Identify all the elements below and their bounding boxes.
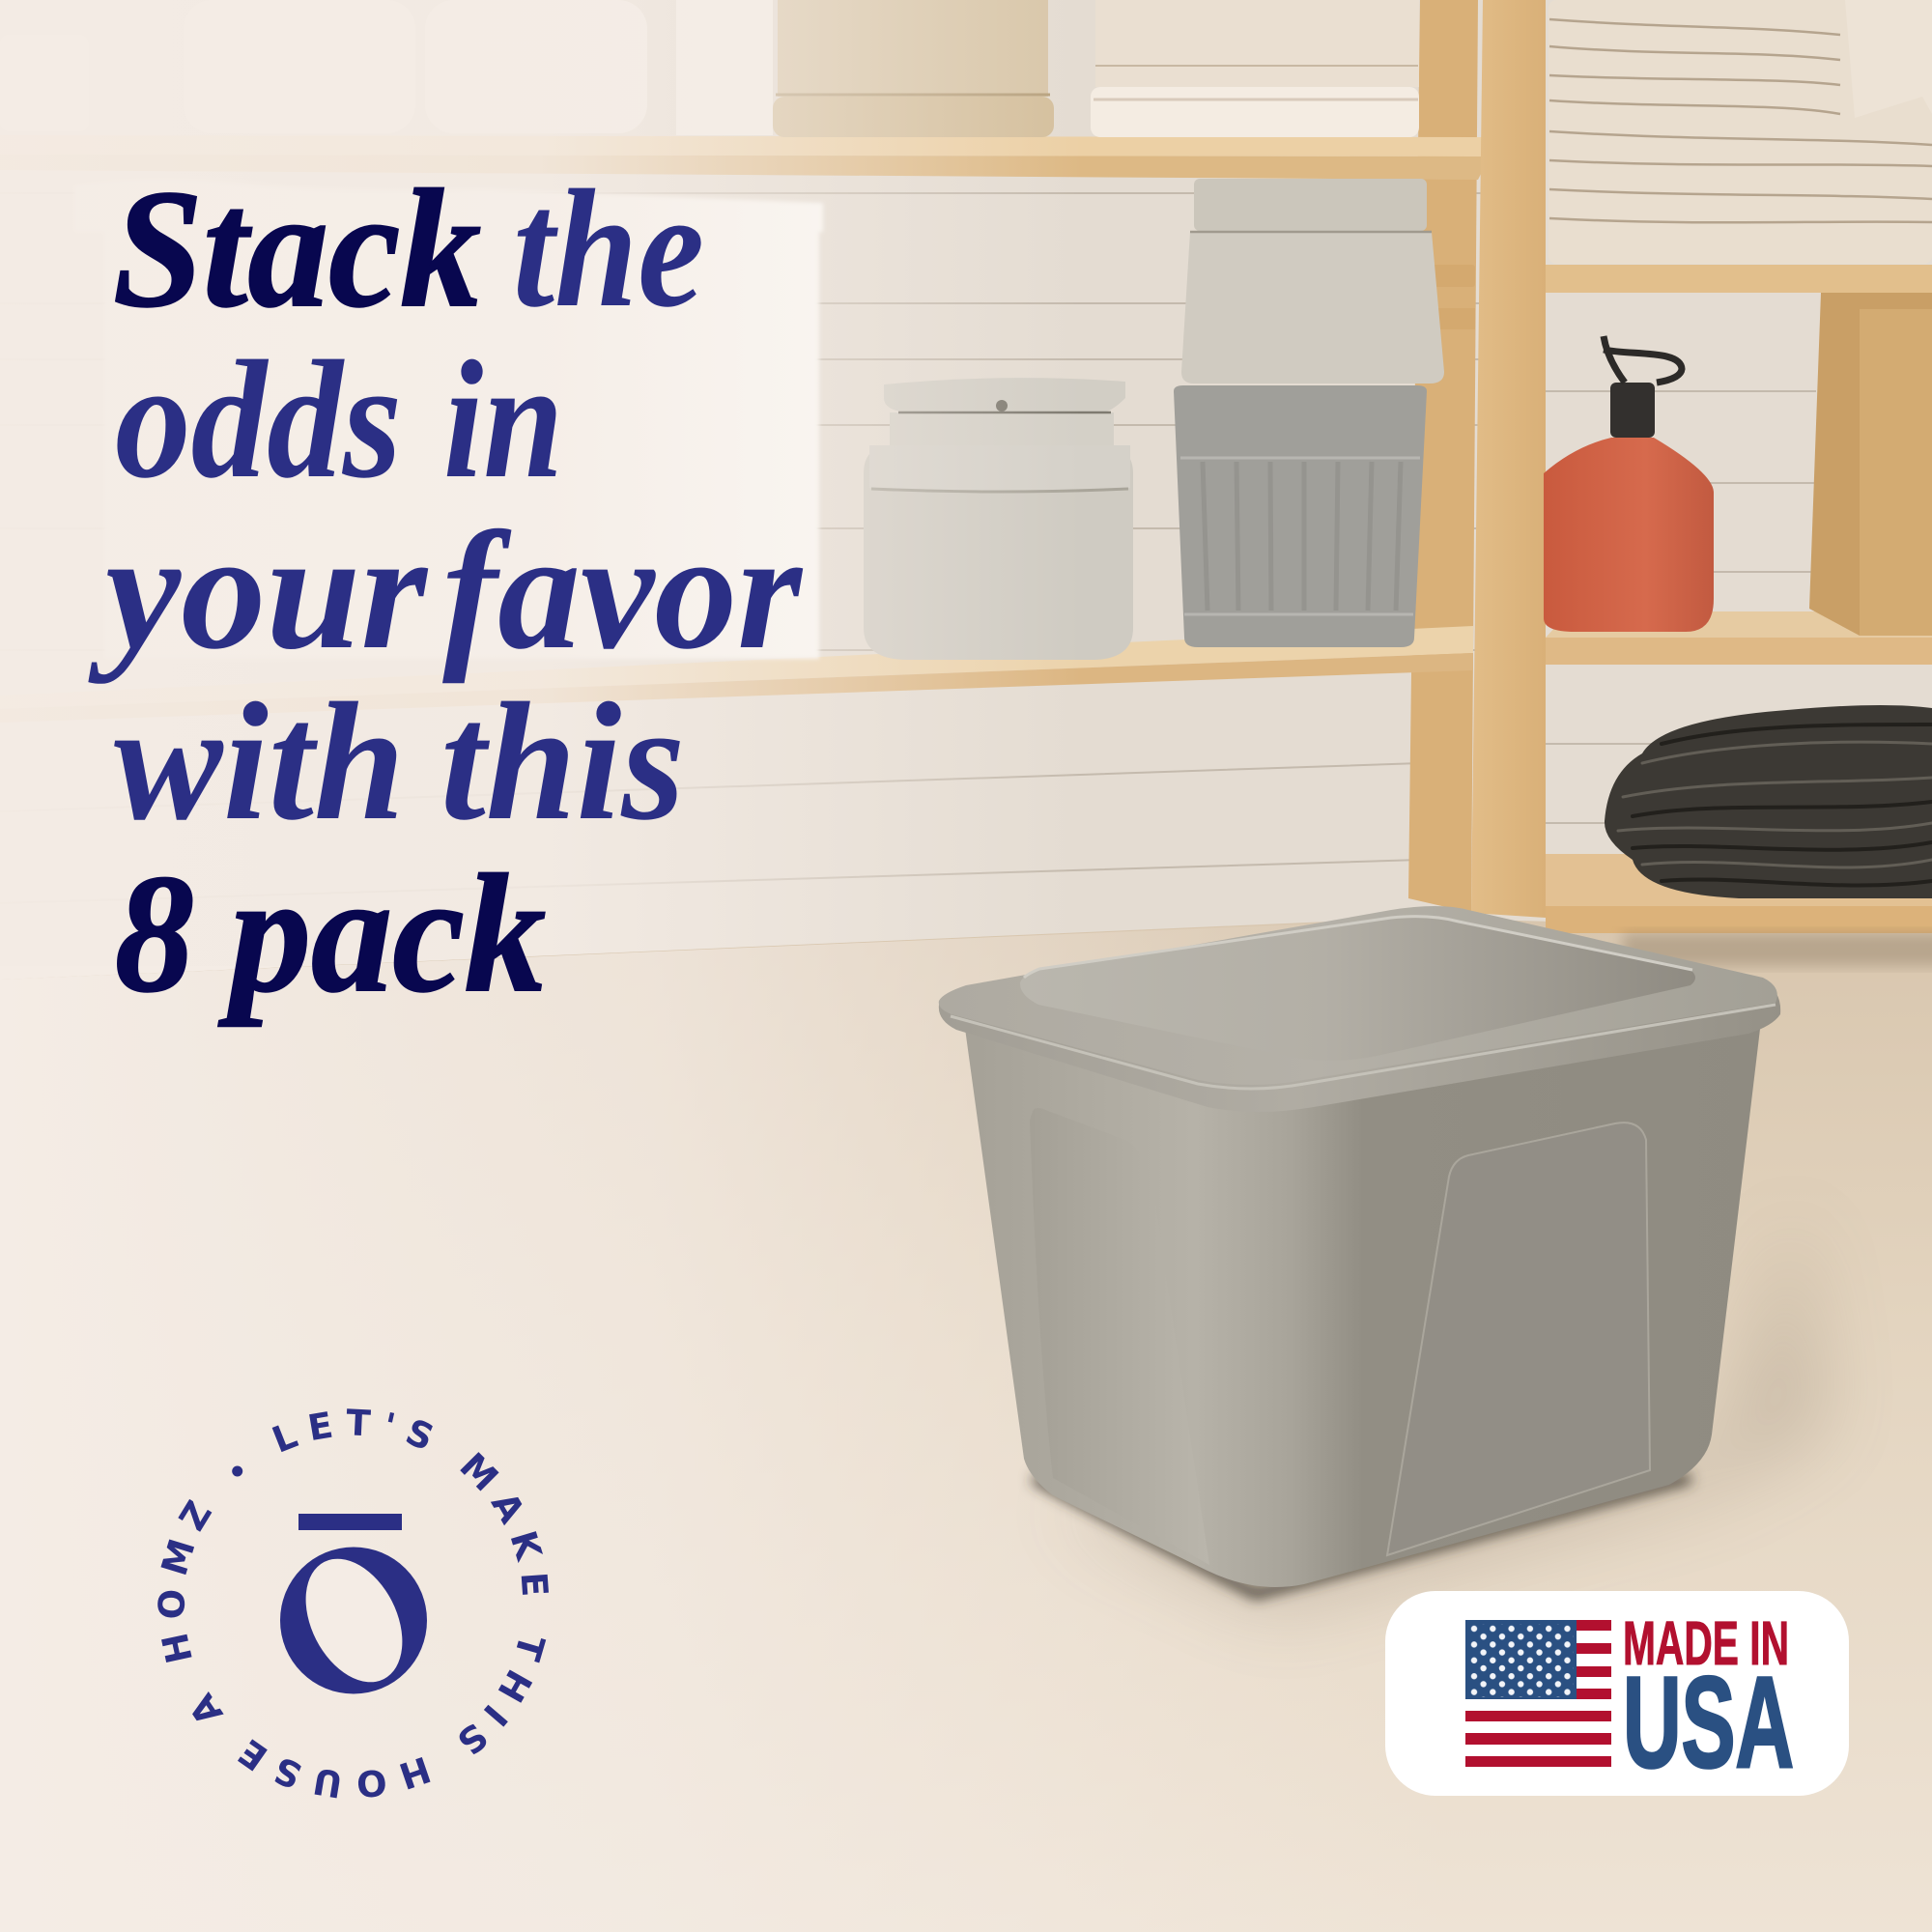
USA label: USA (1623, 1651, 1794, 1795)
headline line 1 (113, 155, 704, 342)
top shelf (0, 135, 1490, 180)
striped fabric bin (1548, 0, 1932, 264)
headline line 4: with (114, 668, 405, 855)
bin body (963, 1005, 1763, 1587)
bin opening (1020, 917, 1695, 1061)
headline line 1: the (513, 155, 704, 342)
main post (1471, 0, 1546, 918)
stacked round pot with lid (864, 378, 1133, 660)
middle shelf (0, 626, 1473, 723)
right bottom shelf (1546, 854, 1932, 933)
logo o mark (280, 1543, 427, 1698)
coiled black hose (1605, 705, 1932, 898)
rear post (1408, 0, 1478, 913)
white storage tote behind headline (74, 179, 823, 659)
headline line 3 (88, 497, 804, 684)
headline line 1: Stack (113, 155, 481, 342)
headline line 5: pack (218, 839, 546, 1027)
headline line 4: this (440, 668, 685, 855)
right upper shelf (1546, 265, 1932, 293)
left fade overlay on floor (0, 918, 1449, 1932)
red jug (1544, 336, 1714, 632)
storage items on shelves (0, 0, 1932, 898)
headline line 5: 8 (115, 839, 194, 1027)
headline line 2: odds (115, 326, 402, 513)
cream basket (1091, 0, 1419, 137)
headline line 2: in (443, 326, 563, 513)
logo macron bar (298, 1514, 402, 1530)
circular logo badge (157, 1408, 549, 1799)
headline line 4 (114, 668, 685, 855)
left fade overlay on wall (0, 0, 1082, 980)
shelving unit (0, 0, 1932, 933)
woven basket (773, 0, 1054, 137)
lid rim (939, 908, 1780, 1112)
right handle recess (1387, 1122, 1650, 1555)
grey storage bin (939, 906, 1780, 1594)
faded items top left (0, 0, 773, 135)
left handle recess (1030, 1108, 1209, 1565)
bin floor shadow (1053, 1208, 1826, 1613)
contact shadow (1034, 1478, 1690, 1594)
circular slogan: LET'S MAKE THIS HOUSE A HOMZ (157, 1408, 549, 1799)
right middle shelf (1546, 611, 1932, 665)
headline line 3: favor (442, 497, 804, 684)
cardboard box (1809, 293, 1932, 636)
separator dot (232, 1466, 242, 1476)
headline line 3: your (88, 497, 429, 684)
american flag (1465, 1620, 1611, 1767)
shelf pegs (1429, 265, 1475, 329)
made in USA badge (1385, 1591, 1849, 1796)
headline (88, 155, 804, 1027)
under-shelf floor shadow (1623, 933, 1932, 966)
grey ribbed bucket (1174, 385, 1427, 647)
badge background (1385, 1591, 1849, 1796)
upper beige pot (1181, 179, 1444, 384)
made in label: MADE IN (1623, 1608, 1789, 1678)
